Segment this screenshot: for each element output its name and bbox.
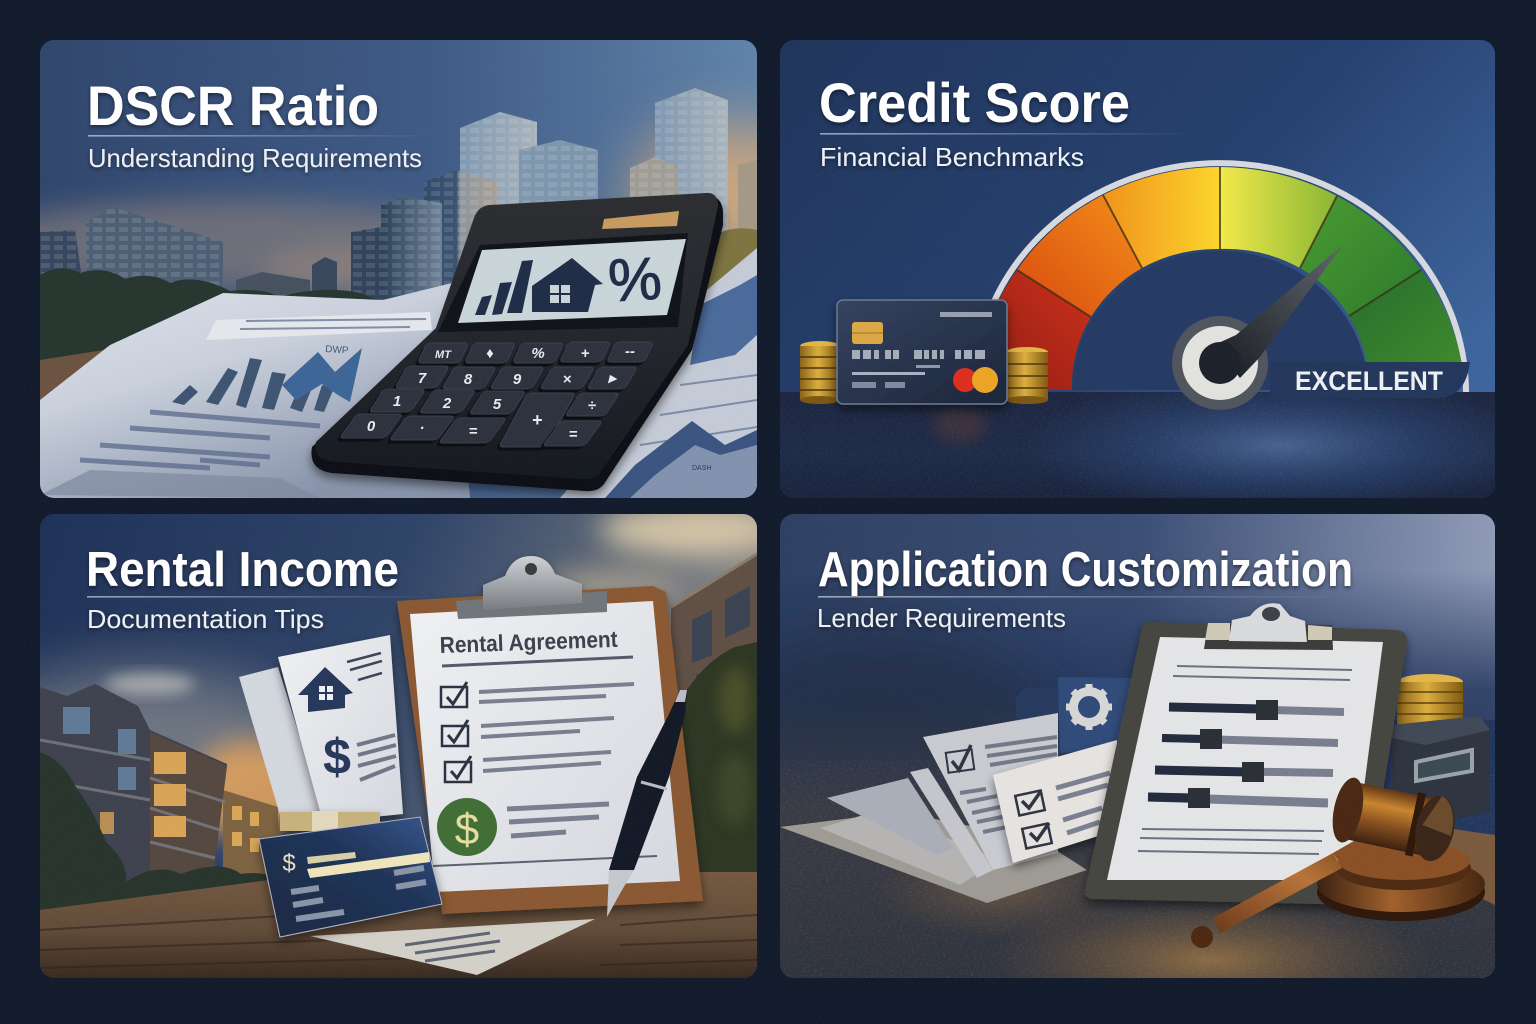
calculator keys: ·	[420, 420, 424, 437]
sky background	[40, 40, 757, 498]
subheading: Financial Benchmarks	[820, 142, 1084, 172]
calculator keys: ▸	[607, 370, 618, 387]
calculator keys: =	[469, 423, 478, 440]
credit card	[837, 300, 1007, 404]
slider 3	[1155, 762, 1333, 782]
apartment building left	[40, 684, 278, 890]
text: Rental Agreement: Rental Agreement	[439, 626, 618, 658]
calculator keys: %	[531, 345, 545, 362]
city skyline	[40, 88, 757, 300]
gavel handle	[1213, 853, 1342, 933]
bank check: $	[282, 850, 296, 877]
calculator keys: ♦	[486, 345, 494, 362]
icon: green dollar coin	[437, 798, 497, 856]
bottom paper	[310, 919, 595, 975]
calculator keys: =	[569, 426, 578, 443]
dark storage box	[1392, 716, 1490, 832]
coin stack	[1397, 674, 1463, 725]
gavel	[1191, 775, 1485, 948]
calculator	[311, 193, 723, 491]
sky	[40, 514, 757, 978]
slider 1	[1169, 700, 1344, 720]
wooden table	[40, 872, 757, 978]
divider	[820, 133, 1195, 135]
calculator screen	[438, 233, 688, 332]
calculator keys	[339, 342, 654, 447]
panel: Rental Income	[40, 514, 757, 978]
bank check	[259, 811, 442, 937]
calculator keys: +	[581, 345, 590, 362]
gauge rim	[974, 163, 1466, 392]
panel: Application Customization	[710, 514, 1495, 1024]
report bar chart	[172, 358, 334, 412]
clipboard	[397, 556, 703, 914]
solar strip	[602, 211, 679, 229]
heading: Rental Income: Rental Income	[86, 543, 399, 597]
table	[40, 350, 104, 400]
pen	[607, 690, 687, 917]
calculator keys: 9	[513, 371, 522, 388]
secondary charts on the right	[560, 248, 757, 498]
divider	[818, 596, 1348, 598]
folder and gear tile	[1016, 677, 1135, 753]
heading: DSCR Ratio: DSCR Ratio	[87, 74, 379, 137]
clipboard clip	[1204, 603, 1333, 650]
calculator keys: 7	[418, 370, 427, 387]
back documents: $	[323, 729, 351, 785]
divider	[88, 135, 438, 137]
icon: house	[298, 667, 353, 712]
checklist document	[993, 740, 1117, 863]
excellent ribbon: EXCELLENT	[1295, 366, 1443, 396]
slider 4	[1148, 788, 1328, 808]
clipboard with sliders	[1085, 603, 1407, 905]
credit score gauge	[974, 163, 1466, 410]
icon: green dollar coin: $	[455, 805, 479, 854]
panel: Credit Score	[780, 40, 1536, 515]
subheading: Documentation Tips	[87, 604, 324, 634]
excellent ribbon	[1270, 362, 1470, 398]
financial report document: DWP	[325, 344, 349, 357]
background	[780, 40, 1495, 498]
right coin stack	[1006, 347, 1048, 404]
back documents	[239, 635, 403, 825]
heading: Credit Score: Credit Score	[819, 71, 1130, 134]
secondary charts on the right: DASH	[692, 465, 711, 472]
panel: DSCR Ratio	[40, 40, 757, 498]
trees left	[40, 752, 281, 915]
calculator keys: +	[532, 410, 543, 430]
gavel base	[1317, 863, 1485, 921]
metal clip	[456, 556, 607, 619]
calculator keys: 0	[367, 418, 376, 435]
gauge hub	[1172, 316, 1268, 410]
subheading: Lender Requirements	[817, 603, 1066, 633]
calculator keys: ×	[563, 371, 572, 388]
trees right	[680, 642, 757, 885]
needle	[1214, 245, 1343, 378]
calculator keys: 5	[493, 396, 502, 413]
icon: gear	[1066, 684, 1112, 730]
left coin stack	[800, 341, 840, 404]
calculator keys: ÷	[588, 397, 597, 414]
calculator keys: 1	[393, 393, 401, 410]
checklist	[441, 682, 634, 782]
calculator keys: 8	[464, 371, 473, 388]
gavel head	[1327, 775, 1460, 865]
subheading: Understanding Requirements	[88, 143, 422, 173]
heading: Application Customization: Application Customization	[818, 543, 1353, 597]
fanned documents	[780, 713, 1087, 903]
paper lines	[1138, 666, 1352, 854]
slider 2	[1162, 729, 1338, 749]
stone table	[780, 700, 1495, 1024]
calculator keys: 2	[442, 395, 452, 412]
trees	[40, 268, 377, 360]
divider	[87, 596, 437, 598]
calculator screen: %	[607, 245, 663, 314]
textured floor	[780, 392, 1495, 498]
calculator keys: --	[625, 343, 635, 360]
financial report document	[40, 283, 470, 498]
calculator keys: MT	[435, 349, 452, 361]
background	[780, 514, 1495, 978]
building right	[670, 552, 757, 694]
